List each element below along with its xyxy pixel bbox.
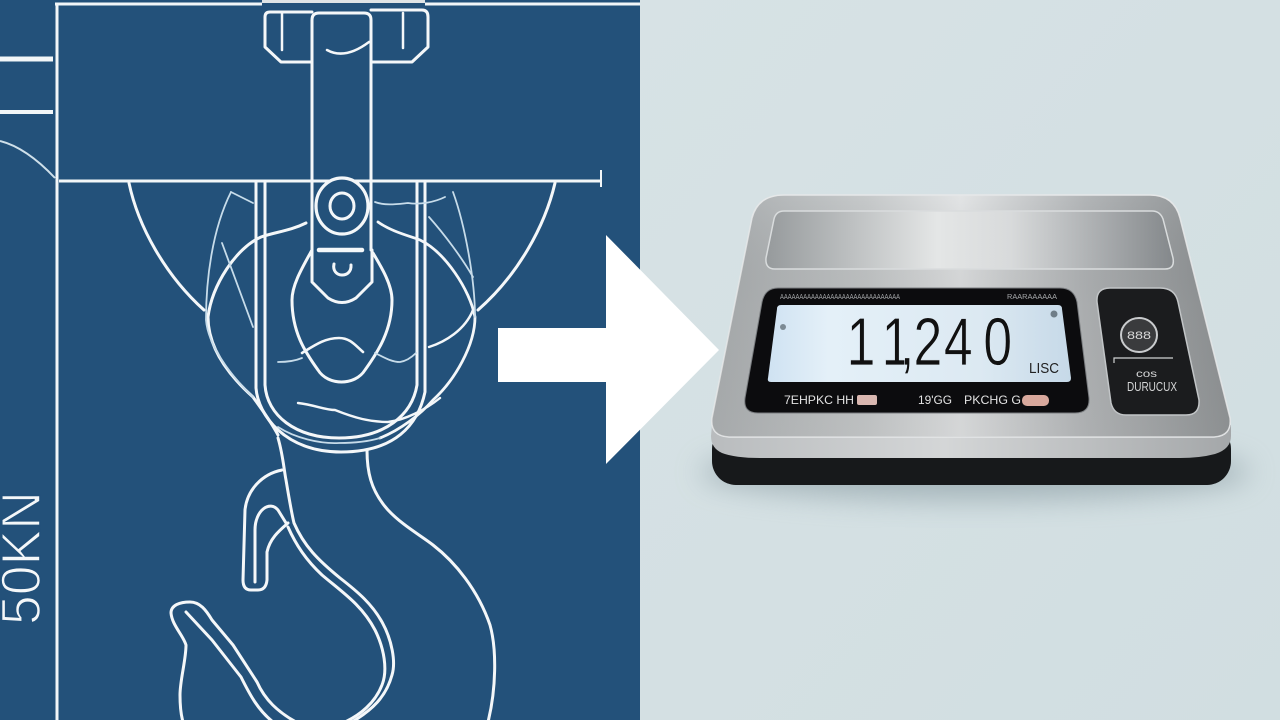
shank slot xyxy=(319,248,362,252)
top window xyxy=(766,211,1173,269)
scale shadow xyxy=(700,444,1250,500)
pivot outer circle xyxy=(316,178,368,234)
display bezel xyxy=(745,288,1089,413)
shank arc xyxy=(334,264,351,275)
large side arcs xyxy=(129,183,555,310)
bezel middle label: 19'GG xyxy=(918,393,952,407)
thin sketch lines xyxy=(206,192,475,443)
top plate shading xyxy=(712,195,1230,437)
safety latch xyxy=(243,470,288,590)
bezel top text: AAAAAAAAAAAAAAAAAAAAAAAAAAAAAAA xyxy=(780,294,900,301)
cap ticks xyxy=(282,13,403,50)
hook back xyxy=(367,450,495,720)
button rule xyxy=(1114,358,1173,363)
bezel right label: PKCHG G xyxy=(964,393,1021,407)
blueprint frame lines xyxy=(0,1,640,720)
button small text: cos xyxy=(1136,369,1157,380)
LCD dots xyxy=(780,324,786,330)
shank notch xyxy=(327,42,369,54)
icon: crane hook blueprint xyxy=(129,10,555,720)
LCD unit: LISC xyxy=(1029,360,1059,377)
double verticals and U strap xyxy=(256,181,425,452)
hook body outer xyxy=(278,438,394,720)
button label: DURUCUX xyxy=(1127,379,1177,394)
bezel top right text: RAARAAAAAA xyxy=(1007,294,1057,301)
emblem dots: 888 xyxy=(1127,330,1151,342)
button emblem xyxy=(1121,318,1157,352)
bezel bottom labels: 7EHPKC HH xyxy=(784,393,854,407)
hook cap xyxy=(265,10,428,62)
pivot inner circle xyxy=(330,193,354,219)
scale base xyxy=(712,425,1231,485)
panel: blueprint background xyxy=(0,0,640,720)
scale lip xyxy=(711,425,1231,458)
bezel badge right xyxy=(1022,395,1049,406)
icon: digital scale xyxy=(700,195,1250,500)
teardrop xyxy=(292,250,392,382)
LCD reading: 11,240 xyxy=(847,303,1012,380)
side button panel xyxy=(1097,288,1199,415)
scale top plate xyxy=(712,195,1230,437)
hook tip xyxy=(171,602,296,720)
bezel badge left xyxy=(857,395,877,405)
panel: light background xyxy=(640,0,1280,720)
arrow xyxy=(498,235,719,464)
LCD screen xyxy=(768,305,1071,382)
shank xyxy=(312,13,372,302)
teardrop wave xyxy=(302,338,363,353)
body loops xyxy=(208,223,306,435)
